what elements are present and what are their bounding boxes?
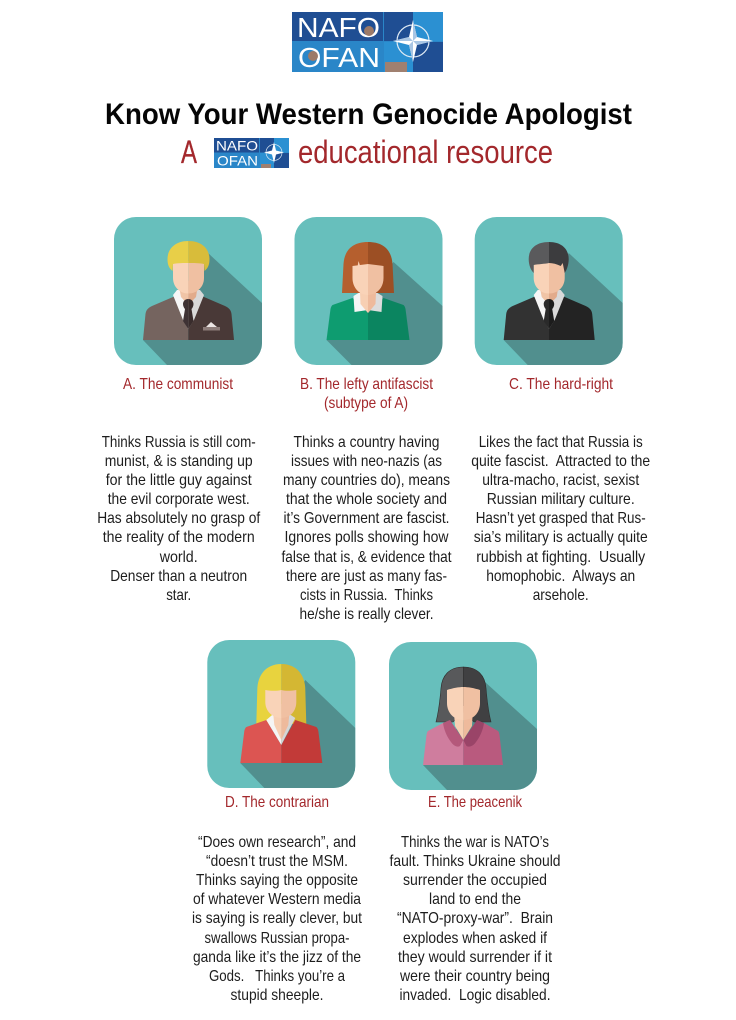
title: Know Your Western Genocide Apologist [105,98,632,131]
subtitle: educational resource [298,134,553,170]
text block C: Russian military culture. [487,491,635,508]
text block E: were their country being [399,968,550,985]
text block B: issues with neo-nazis (as [291,453,442,470]
text block C: sia’s military is actually quite [474,529,648,546]
subtitle [181,134,553,170]
label E: E. The peacenik [428,794,523,811]
text block C: homophobic. Always an [486,568,635,585]
text block D: Gods. Thinks you’re a [209,968,345,985]
text block D: of whatever Western media [193,891,361,908]
NAFO OFAN logo: OFAN [298,42,380,73]
text block B: many countries do), means [283,472,450,489]
small NAFO OFAN logo [214,138,289,168]
text block A: munist, & is standing up [105,453,253,470]
text block B: false that is, & evidence that [282,549,452,566]
text block C: rubbish at fighting. Usually [476,549,645,566]
text block B: Thinks a country having [294,434,440,451]
text block C: quite fascist. Attracted to the [471,453,650,470]
text block D: swallows Russian propa- [204,930,350,947]
text block A: the reality of the modern [103,529,255,546]
text block D: is saying is really clever, but [192,910,362,927]
text block B: that the whole society and [286,491,447,508]
text block D: stupid sheeple. [230,987,324,1004]
text block A: Denser than a neutron [110,568,247,585]
text block A: star. [166,587,191,604]
text block A: the evil corporate west. [108,491,250,508]
text block A: for the little guy against [106,472,252,489]
subtitle: A [181,134,197,170]
label B [300,376,433,412]
text block E: Thinks the war is NATO’s [401,834,549,851]
text block A: world. [159,549,198,566]
text block A [97,434,261,604]
label A: A. The communist [123,376,233,393]
text block D: Thinks saying the opposite [196,872,358,889]
text block D [192,834,362,1004]
label B: B. The lefty antifascist [300,376,433,393]
text block C: Hasn’t yet grasped that Rus- [476,510,646,527]
text block B [282,434,452,623]
text block B: it’s Government are fascist. [284,510,450,527]
text block E: they would surrender if it [398,949,552,966]
small NAFO OFAN logo: OFAN [217,152,258,168]
text block D: “Does own research”, and [198,834,356,851]
label B: (subtype of A) [324,395,408,412]
label D: D. The contrarian [225,794,329,811]
panel C: avatar, the hard-right [475,217,623,365]
panel D: avatar, the contrarian [207,640,355,788]
text block B: cists in Russia. Thinks [300,587,433,604]
text block E: land to end the [429,891,521,908]
text block C: arsehole. [533,587,589,604]
text block A: Has absolutely no grasp of [97,510,261,527]
text block D: ganda like it’s the jizz of the [193,949,361,966]
panel E: avatar, the peacenik [389,642,537,790]
text block E: surrender the occupied [403,872,547,889]
NAFO OFAN logo [292,12,443,73]
label C: C. The hard-right [509,376,613,393]
text block E: fault. Thinks Ukraine should [390,853,560,870]
text block E: invaded. Logic disabled. [400,987,550,1004]
text block B: there are just as many fas- [286,568,447,585]
panel B: avatar, the lefty antifascist [294,217,442,365]
text block B: Ignores polls showing how [284,529,449,546]
text block C: ultra-macho, racist, sexist [482,472,640,489]
text block D: “doesn’t trust the MSM. [206,853,348,870]
panel A: avatar, the communist [114,217,262,365]
NAFO OFAN logo: NAFO [297,12,380,43]
text block B: he/she is really clever. [300,606,434,623]
text block E: “NATO-proxy-war”. Brain [397,910,553,927]
text block A: Thinks Russia is still com- [102,434,256,451]
text block C: Likes the fact that Russia is [479,434,643,451]
text block C [471,434,650,604]
small NAFO OFAN logo: NAFO [216,138,258,154]
text block E: explodes when asked if [403,930,547,947]
text block E [390,834,560,1004]
